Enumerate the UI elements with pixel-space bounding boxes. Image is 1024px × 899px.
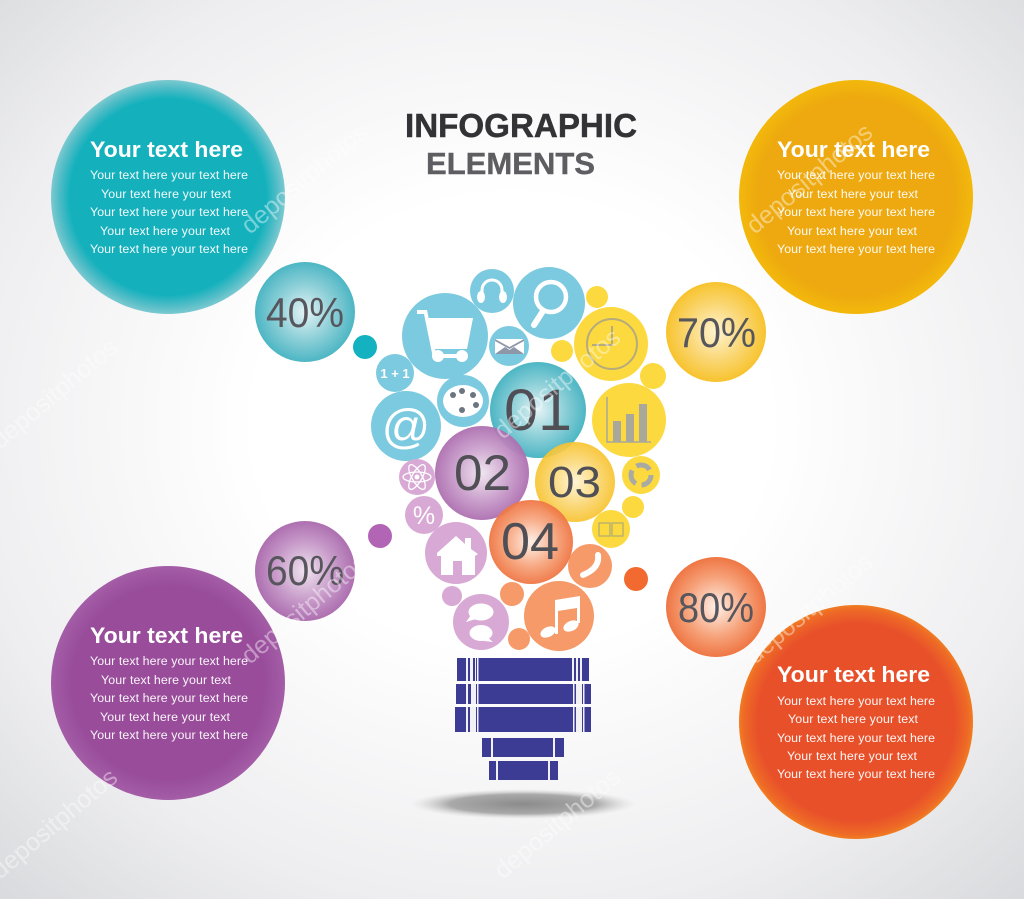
panel: red text circle: [739, 605, 973, 839]
icon: headphones: [470, 269, 514, 313]
panel: red text circle: Your text here your text here: [777, 767, 935, 781]
panel: red text circle: Your text here your text: [788, 712, 919, 726]
icon: palette: [437, 375, 489, 427]
panel: purple text circle: Your text here your text: [100, 710, 231, 724]
percent bubble 40%: [255, 262, 355, 362]
panel: purple text circle: Your text here your text here: [90, 654, 248, 668]
panel: purple text circle: Your text here your text: [101, 673, 232, 687]
percent bubble 70%: 70%: [677, 309, 756, 356]
bubble 01: [490, 362, 586, 458]
bubble 01: 01: [504, 378, 572, 443]
icon: house: [425, 522, 487, 584]
bubble 04: 04: [501, 513, 559, 571]
panel: purple text circle: [51, 566, 285, 800]
icon: percent: %: [413, 502, 435, 530]
icon: magnifier: [513, 267, 585, 339]
bubble 03: 03: [548, 458, 601, 507]
icon: cart: [402, 293, 488, 379]
icon: mail: [489, 326, 529, 366]
watermarks: depositphotos: [489, 763, 626, 885]
icon: music note: [524, 581, 594, 651]
icon: at sign: [371, 391, 441, 461]
icon: recycle: [622, 456, 660, 494]
percent bubble 60%: [255, 521, 355, 621]
bulb base: stacked books: [455, 658, 591, 780]
watermarks: [0, 118, 878, 885]
percent bubble 80%: [666, 557, 766, 657]
small filler bubbles: [442, 286, 666, 650]
panel: yellow text circle: [739, 80, 973, 314]
panel: yellow text circle: Your text here your text here: [777, 242, 935, 256]
watermarks: depositphotos: [741, 548, 878, 670]
panel: red text circle: Your text here your text here: [777, 731, 935, 745]
icon: chat: [453, 594, 509, 650]
percent bubble 80%: 80%: [678, 584, 754, 631]
ground shadow: [410, 789, 636, 819]
panel: red text circle: Your text here your text here: [777, 694, 935, 708]
title: INFOGRAPHIC: [405, 107, 637, 144]
percent bubble 40%: 40%: [266, 289, 344, 336]
panel: yellow text circle: Your text here: [777, 137, 930, 162]
panel: yellow text circle: Your text here your text here: [777, 168, 935, 182]
panel: teal text circle: Your text here your text here: [90, 168, 248, 182]
panel: yellow text circle: Your text here your text here: [777, 205, 935, 219]
panel: yellow text circle: Your text here your text: [788, 187, 919, 201]
panel: teal text circle: [51, 80, 285, 314]
percent bubble 70%: [666, 282, 766, 382]
panel: teal text circle: Your text here your text: [100, 224, 231, 238]
panel: teal text circle: Your text here your text here: [90, 242, 248, 256]
watermarks: depositphotos: [489, 323, 626, 445]
icon: clock: [574, 307, 648, 381]
watermarks: depositphotos: [236, 118, 373, 240]
icon: at sign: @: [382, 401, 430, 454]
icon: one plus one: [376, 354, 414, 392]
panel: red text circle: Your text here: [777, 662, 930, 687]
bubble 03: [535, 442, 615, 522]
icon: bar chart: [592, 383, 666, 457]
bubble 02: [435, 426, 529, 520]
panel: teal text circle: Your text here your text: [101, 187, 232, 201]
icon: one plus one: 1 + 1: [380, 366, 410, 381]
watermarks: depositphotos: [741, 118, 878, 240]
connector dots: [353, 335, 648, 591]
panel: purple text circle: Your text here your text here: [90, 691, 248, 705]
panel: purple text circle: Your text here your text here: [90, 728, 248, 742]
panel: purple text circle: Your text here: [90, 623, 243, 648]
icon: book: [592, 510, 630, 548]
bubble 02: 02: [454, 445, 511, 501]
panel: teal text circle: Your text here your text here: [90, 205, 248, 219]
icon: percent: [405, 496, 443, 534]
bubble 04: [489, 500, 573, 584]
percent bubble 60%: 60%: [266, 547, 344, 594]
watermarks: depositphotos: [236, 548, 373, 670]
panel: teal text circle: Your text here: [90, 137, 243, 162]
title: [405, 107, 637, 181]
panel: yellow text circle: Your text here your text: [787, 224, 918, 238]
panel: red text circle: Your text here your text: [787, 749, 918, 763]
title: ELEMENTS: [426, 146, 595, 181]
icon: atom: [399, 459, 435, 495]
icon: phone: [568, 544, 612, 588]
